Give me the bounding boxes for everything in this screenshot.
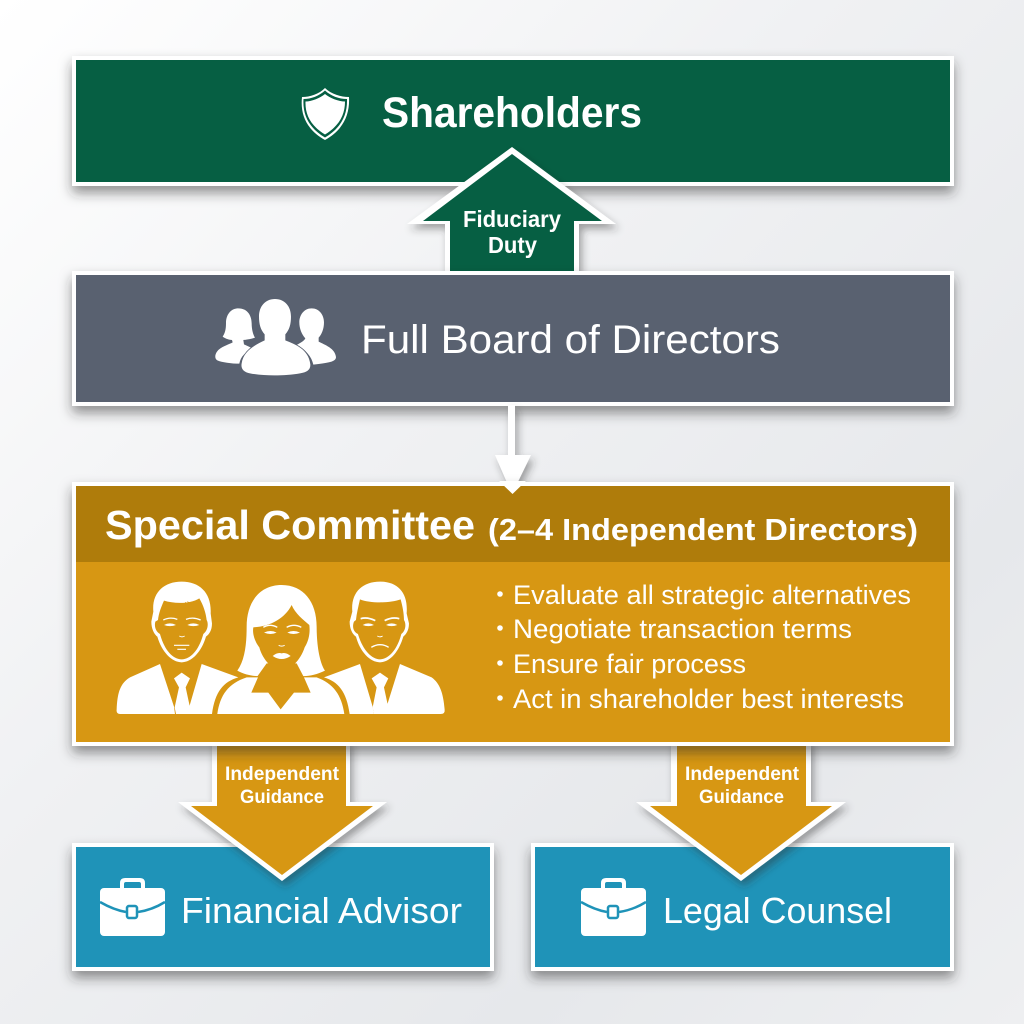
label: financial advisor: Financial Advisor	[181, 890, 462, 931]
arrow: fiduciary duty	[407, 147, 616, 272]
heading: full board: Full Board of Directors	[361, 318, 780, 362]
man left	[117, 582, 238, 714]
bullet list: committee duties: Negotiate transaction terms	[513, 614, 852, 644]
arrow: independent guidance right	[636, 740, 846, 881]
man right	[324, 582, 445, 714]
panel: financial advisor	[72, 843, 494, 971]
arrow: fiduciary duty: Fiduciary	[463, 206, 561, 232]
bullet list: committee duties: Ensure fair process	[513, 649, 746, 679]
arrow: independent guidance left	[178, 740, 387, 881]
heading: special committee: Special Committee	[105, 502, 475, 548]
label: legal counsel: Legal Counsel	[663, 890, 892, 931]
arrow: fiduciary duty: Duty	[488, 232, 537, 258]
woman center	[217, 585, 344, 714]
panel: shareholders	[72, 56, 954, 186]
icon: briefcase	[581, 878, 646, 936]
arrow: independent guidance left: Independent	[225, 764, 340, 785]
bullet list: committee duties: Evaluate all strategic alternatives	[513, 580, 911, 610]
arrow: independent guidance left: Guidance	[240, 787, 324, 808]
panel: special committee	[72, 482, 954, 746]
arrow tip: board to committee overlap	[499, 481, 526, 494]
arrow: independent guidance right: Guidance	[699, 787, 784, 808]
bullet list: committee duties	[497, 580, 911, 714]
icon: shield	[302, 88, 349, 140]
panel: full board of directors	[72, 271, 954, 406]
icon: briefcase	[100, 878, 165, 936]
panel: legal counsel	[531, 843, 954, 971]
bullet list: committee duties: Act in shareholder best interests	[513, 684, 904, 714]
heading: shareholders: Shareholders	[382, 89, 642, 137]
arrow: independent guidance right: Independent	[685, 764, 800, 785]
subheading: independent directors: (2–4 Independent Directors)	[488, 512, 918, 547]
arrow: board to committee	[495, 405, 531, 494]
icon: three directors	[117, 582, 445, 714]
icon: board group	[215, 299, 336, 375]
